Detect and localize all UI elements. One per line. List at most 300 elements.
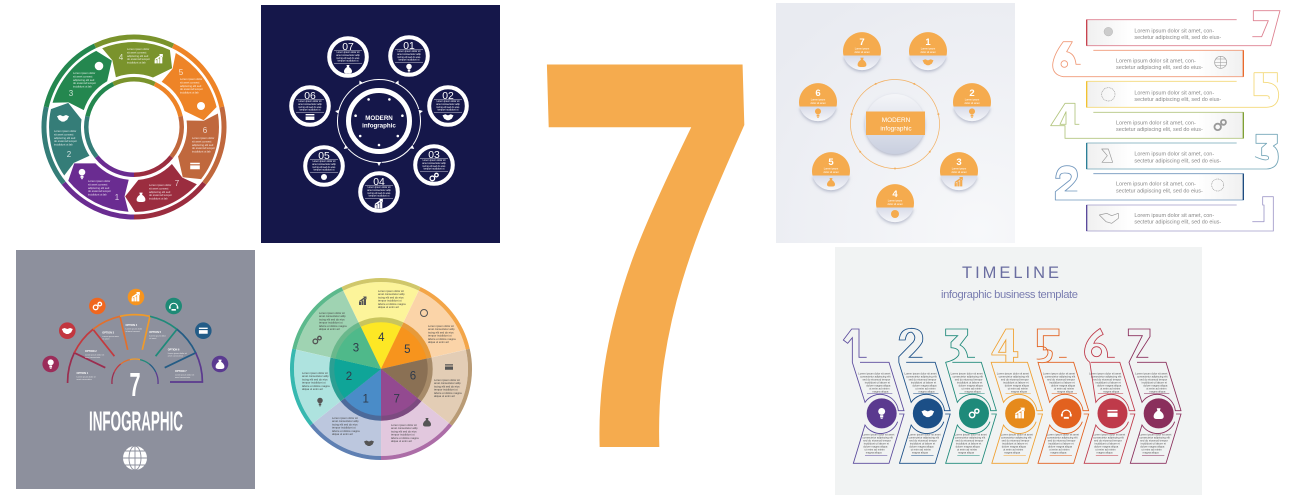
segment text: incididunt ut lab (149, 197, 168, 201)
column 3: consectetur adipiscing elit (952, 374, 983, 378)
segment text: incididunt ut lab (192, 150, 211, 154)
pie text: tempor incididunt ut (434, 388, 458, 392)
column 2: dolore magna aliqua (912, 383, 937, 387)
satellite text: Lorem ipsum dolor sit (437, 100, 459, 103)
column 4: Lorem ipsum dolor sit amet (997, 371, 1029, 375)
arch option labels: OPTION 3 (102, 332, 115, 334)
column 6: magna aliqua (1103, 389, 1120, 393)
row 3: sectetur adipiscing elit, sed do eius- (1134, 158, 1221, 164)
pie wedges (286, 280, 476, 466)
satellite text: tempor incididunt ut (314, 169, 335, 172)
pie icons (313, 296, 453, 446)
column 5: ut enim ad minim (1049, 448, 1070, 452)
arch option labels: amet consectetur (175, 376, 191, 379)
panel: navy circular infographic (261, 5, 500, 243)
centre title: MODERN (365, 115, 393, 122)
panel: segmented ring infographic (38, 37, 230, 225)
column 3: Lorem ipsum dolor sit amet (955, 433, 987, 437)
segment text: Lorem ipsum dolor (180, 78, 202, 81)
column 1: magna aliqua (866, 451, 882, 455)
column 3: Lorem ipsum dolor sit amet (951, 371, 983, 375)
satellite circles (291, 37, 467, 211)
segment text: do eiusmod tempor (73, 81, 96, 85)
column 6: incididunt ut labore et (1095, 442, 1120, 446)
segment numbers: 2 (67, 150, 72, 159)
column 5: incididunt ut labore et (1049, 380, 1075, 384)
row 4 (1051, 103, 1243, 138)
row 2: sectetur adipiscing elit, sed do eius- (1116, 188, 1203, 194)
central ring (348, 90, 410, 152)
segment text: do eiusmod tempor (88, 189, 111, 193)
step circle 5: 5 (828, 157, 834, 168)
row 1: sectetur adipiscing elit, sed do eius- (1134, 220, 1221, 226)
pie numbers: 7 (393, 393, 400, 405)
segment text: sit amet consect (127, 50, 147, 54)
satellite numbers: 03 (428, 150, 440, 161)
pie text: amet consectetur adip (332, 419, 359, 423)
satellite numbers (304, 41, 454, 188)
column 5: ut enim ad minim (1054, 386, 1075, 390)
step circle 4: Lorem ipsum (888, 200, 902, 202)
column 1: incididunt ut labore et (865, 380, 890, 384)
column 7: magna aliqua (1143, 451, 1159, 455)
satellite text: amet consectetur adip (436, 103, 460, 106)
step circle 4: 4 (892, 189, 898, 200)
column 3: ut enim ad minim (957, 448, 978, 452)
segment text: incididunt ut lab (88, 193, 107, 197)
segment text: adipiscing elit sed (54, 136, 76, 140)
step circle 7 (843, 32, 881, 70)
arch option labels: OPTION 2 (85, 350, 97, 353)
icon circles (42, 289, 228, 372)
arch option labels: sit amet (149, 337, 157, 340)
step circle 6: 6 (815, 88, 821, 99)
column 4: sed do eiusmod tempor (1001, 377, 1029, 381)
timeline subtitle: infographic business template (941, 289, 1078, 301)
arch option labels: OPTION 1 (76, 372, 89, 375)
pie text: aliqua ut enim ad (302, 387, 323, 391)
step circle 6: Lorem ipsum (811, 98, 825, 102)
row 7: sectetur adipiscing elit, sed do eius- (1134, 35, 1221, 41)
row 3: Lorem ipsum dolor sit amet, con- (1134, 152, 1214, 158)
satellite text: Lorem ipsum dolor sit (423, 159, 445, 162)
timeline title: TIMELINE (962, 264, 1059, 282)
column 6: Lorem ipsum dolor sit amet (1093, 433, 1125, 437)
step circle 5: dolor sit amet (823, 171, 839, 174)
column 2: magna aliqua (919, 389, 935, 393)
column 1: sed do eiusmod tempor (863, 439, 891, 443)
row 4: sectetur adipiscing elit, sed do eius- (1116, 127, 1203, 133)
segment text: sit amet consect (54, 132, 74, 136)
pie numbers: 4 (378, 332, 385, 344)
row 7 (1087, 11, 1280, 46)
pie text: aliqua ut enim ad (434, 394, 455, 398)
panel: orange circular infographic (776, 3, 1015, 243)
segment text: do eiusmod tempor (149, 193, 172, 197)
column 1 (843, 329, 904, 463)
column 3: dolore magna aliqua (956, 445, 980, 449)
step circle 3: dolor sit amet (951, 171, 967, 174)
outer arch arcs and spokes (68, 315, 202, 383)
column 2: Lorem ipsum dolor sit amet (904, 371, 937, 375)
pie text: Lorem ipsum dolor sit (391, 424, 417, 427)
centre title: infographic (362, 122, 396, 130)
step circle 7: Lorem ipsum (855, 48, 869, 50)
column 4: consectetur adipiscing elit (1001, 436, 1032, 440)
column 5: incididunt ut labore et (1048, 442, 1074, 446)
row 5: sectetur adipiscing elit, sed do eius- (1134, 97, 1221, 103)
satellite text: Lorem ipsum dolor sit (398, 50, 420, 53)
segment numbers: 1 (115, 193, 120, 202)
column 3: magna aliqua (958, 451, 974, 455)
column 2: Lorem ipsum dolor sit amet (908, 433, 941, 437)
row 6 (1053, 42, 1243, 77)
segment text: adipiscing elit sed (192, 143, 214, 147)
satellite text: Lorem ipsum dolor sit (337, 51, 359, 54)
pie text: Lorem ipsum dolor sit (428, 325, 454, 328)
column 7: incididunt ut labore et (1141, 442, 1166, 446)
column 7: dolore magna aliqua (1143, 383, 1168, 387)
satellite numbers: 05 (318, 151, 330, 162)
segment text: Lorem ipsum dolor (88, 180, 110, 183)
segment numbers: 4 (119, 53, 124, 62)
centre circle with title band (865, 94, 925, 154)
segment numbers: 7 (175, 179, 180, 188)
column 3: incididunt ut labore et (957, 380, 983, 384)
segment text: do eiusmod tempor (192, 146, 215, 150)
pie text: labore et dolore magna (319, 324, 347, 328)
column 4: consectetur adipiscing elit (999, 374, 1029, 378)
column 2 (899, 328, 950, 463)
satellite text: tempor incididunt ut (399, 59, 420, 62)
segment numbers: 5 (179, 68, 184, 77)
satellite text: amet consectetur adip (367, 189, 391, 192)
pie text: aliqua ut enim ad (391, 439, 412, 443)
column 4: incididunt ut labore et (1003, 380, 1029, 384)
column 2: consectetur adipiscing elit (909, 436, 939, 440)
column 7: ut enim ad minim (1142, 448, 1163, 452)
pie text: amet consectetur adip (434, 381, 461, 385)
pie text: iscing elit sed do eius (378, 295, 404, 299)
step circle 5: Lorem ipsum (824, 168, 838, 170)
step circle 2: dolor sit amet (964, 102, 980, 105)
pie text: amet consectetur adip (302, 374, 329, 378)
row 1: Lorem ipsum dolor sit amet, con- (1134, 213, 1214, 219)
column 7: consectetur adipiscing elit (1139, 436, 1170, 440)
column 5 (1037, 329, 1089, 463)
step circle 6 (799, 83, 837, 121)
column 1: incididunt ut labore et (864, 442, 889, 446)
segment text: adipiscing elit sed (127, 54, 149, 58)
satellite text: iscing elit sed do eius (313, 166, 336, 169)
column 4: Lorem ipsum dolor sit amet (1001, 433, 1033, 437)
step circle 2: 2 (969, 88, 975, 99)
ring of seven segments (38, 37, 230, 225)
timeline columns (843, 328, 1181, 463)
step circle 7: 7 (859, 37, 865, 48)
pie text: aliqua ut enim ad (428, 340, 449, 344)
step circle 1 (909, 32, 947, 70)
column 4: dolore magna aliqua (1002, 445, 1026, 449)
column 1: ut enim ad minim (869, 386, 890, 390)
column 5: dolore magna aliqua (1048, 445, 1073, 449)
satellite text: amet consectetur adip (298, 103, 322, 106)
pie text: tempor incididunt ut (332, 426, 356, 430)
segment text: sit amet consect (88, 182, 108, 186)
pie text (302, 289, 462, 443)
satellite numbers: 06 (304, 91, 316, 102)
column 4: dolore magna aliqua (1005, 383, 1029, 387)
pie text: iscing elit sed do eius (332, 422, 358, 426)
pie text: aliqua ut enim ad (378, 305, 399, 309)
column 7: sed do eiusmod tempor (1139, 377, 1167, 381)
icon: globe (123, 446, 147, 470)
pie text: aliqua ut enim ad (332, 432, 353, 436)
row 4: Lorem ipsum dolor sit amet, con- (1116, 120, 1196, 126)
column 6: sed do eiusmod tempor (1093, 377, 1121, 381)
segment text: adipiscing elit sed (73, 78, 95, 82)
centre title (362, 115, 396, 130)
column 7: dolore magna aliqua (1140, 445, 1165, 449)
column 3: consectetur adipiscing elit (955, 436, 985, 440)
column 2: ut enim ad minim (911, 448, 932, 452)
step circle 7: dolor sit amet (854, 51, 870, 54)
column 6: consectetur adipiscing elit (1091, 374, 1122, 378)
column 5: magna aliqua (1057, 389, 1073, 393)
arch option labels: amet consectetur (76, 378, 92, 381)
arch option labels: Lorem ipsum dolor sit (168, 352, 187, 355)
satellite text: amet consectetur adip (312, 163, 336, 166)
segment text: do eiusmod tempor (54, 139, 77, 143)
pie text: amet consectetur adip (378, 292, 405, 296)
light background (776, 3, 1015, 243)
column 4 (991, 329, 1042, 463)
column 7: magna aliqua (1149, 389, 1166, 393)
column 5: consectetur adipiscing elit (1047, 436, 1078, 440)
column 4: magna aliqua (1011, 389, 1027, 393)
segment text: adipiscing elit sed (149, 190, 171, 194)
column 7: ut enim ad minim (1146, 386, 1167, 390)
segment text: sit amet consect (73, 74, 93, 78)
column 2: ut enim ad minim (915, 386, 936, 390)
column 6 (1084, 328, 1135, 463)
satellite text: tempor incididunt ut (300, 109, 321, 112)
column 4: magna aliqua (1004, 451, 1021, 455)
pie text: iscing elit sed do eius (428, 330, 454, 334)
column 5: sed do eiusmod tempor (1048, 439, 1076, 443)
satellite text: iscing elit sed do eius (437, 106, 460, 109)
pie text: labore et dolore magna (378, 302, 406, 306)
column 6: magna aliqua (1097, 451, 1113, 455)
arch option labels: Lorem ipsum dolor (102, 336, 119, 338)
column 4: ut enim ad minim (1008, 386, 1029, 390)
timeline background (835, 247, 1202, 495)
pie text: iscing elit sed do eius (434, 384, 460, 388)
segment numbers: 3 (69, 89, 74, 98)
satellite numbers: 02 (442, 91, 454, 102)
arch option labels: Lorem ipsum dolor sit (85, 354, 105, 356)
segment text: incididunt ut lab (73, 85, 92, 89)
panel: grey semicircle infographic: INFOGRAPHIC (89, 406, 183, 437)
arch option labels: Lorem ipsum dolor (126, 328, 142, 330)
orbit line with arrows (850, 80, 940, 170)
step circle 3 (940, 152, 978, 190)
step circle 4: dolor sit amet (887, 203, 903, 206)
column 7: incididunt ut labore et (1142, 380, 1167, 384)
arch option labels: Lorem ipsum dolor sit (175, 374, 195, 376)
segment text: sit amet consect (149, 186, 169, 190)
column 2: consectetur adipiscing elit (906, 374, 937, 378)
satellite text: tempor incididunt ut (424, 168, 445, 171)
pie text: labore et dolore magna (428, 337, 456, 341)
column 6: sed do eiusmod tempor (1094, 439, 1122, 443)
arch option labels (76, 324, 195, 381)
column 1: consectetur adipiscing elit (862, 436, 893, 440)
column 1: magna aliqua (872, 389, 889, 393)
row 2: Lorem ipsum dolor sit amet, con- (1116, 182, 1196, 188)
satellite text: tempor incididunt ut (438, 109, 459, 112)
pie numbers (346, 332, 416, 405)
step circle 1: Lorem ipsum (921, 48, 935, 50)
column 1: Lorem ipsum dolor sit amet (858, 371, 891, 375)
inner arch arc (112, 359, 158, 384)
pie text: labore et dolore magna (302, 384, 330, 388)
column 2: sed do eiusmod tempor (909, 377, 936, 381)
satellite icons (306, 64, 454, 208)
row 6: sectetur adipiscing elit, sed do eius- (1116, 65, 1203, 71)
panel: seven slice pie (286, 280, 476, 466)
column 5: magna aliqua (1050, 451, 1067, 455)
satellite text: Lorem ipsum dolor sit (313, 160, 335, 163)
panel: grey semicircle infographic (16, 250, 255, 489)
satellite numbers: 04 (373, 177, 385, 188)
column 1: dolore magna aliqua (866, 383, 891, 387)
arch option labels: OPTION 4 (126, 324, 138, 327)
column 3: ut enim ad minim (962, 386, 983, 390)
segment icons (57, 54, 205, 202)
arch option labels: Lorem ipsum dolor (149, 336, 166, 338)
column 3: incididunt ut labore et (956, 442, 982, 446)
big seven in arch: 7 (129, 366, 141, 403)
column 6: dolore magna aliqua (1094, 445, 1119, 449)
column 6: ut enim ad minim (1100, 386, 1121, 390)
column 1: consectetur adipiscing elit (860, 374, 891, 378)
column 7: Lorem ipsum dolor sit amet (1139, 433, 1172, 437)
satellite text: iscing elit sed do eius (368, 192, 391, 195)
satellite text: iscing elit sed do eius (299, 106, 322, 109)
step circle 3: Lorem ipsum (952, 168, 966, 170)
pie numbers: 5 (404, 344, 411, 356)
column 3: dolore magna aliqua (959, 383, 983, 387)
satellite text: Lorem ipsum dolor sit (368, 186, 390, 189)
row 2 (1055, 166, 1243, 200)
column 7: consectetur adipiscing elit (1137, 374, 1168, 378)
pie text: Lorem ipsum dolor sit (378, 290, 404, 293)
pie text: Lorem ipsum dolor sit (434, 379, 460, 382)
arch option labels: amet consectetur (168, 354, 183, 358)
step circle 1: 1 (925, 37, 931, 48)
column 5: dolore magna aliqua (1051, 383, 1076, 387)
satellite text: iscing elit sed do eius (423, 165, 446, 168)
arch option labels: OPTION 7 (175, 370, 187, 373)
row 5 (1087, 73, 1279, 107)
step circle 5 (812, 152, 850, 190)
grey background (16, 250, 255, 489)
column 6: Lorem ipsum dolor sit amet (1089, 371, 1121, 375)
satellite text (298, 50, 460, 198)
step circle 4 (876, 184, 914, 222)
pie text: tempor incididunt ut (302, 381, 326, 385)
row 6: Lorem ipsum dolor sit amet, con- (1116, 58, 1196, 64)
satellite text: iscing elit sed do eius (337, 57, 360, 60)
satellite text: tempor incididunt ut (338, 60, 359, 63)
column 6: dolore magna aliqua (1097, 383, 1122, 387)
step circle 6: dolor sit amet (810, 102, 826, 105)
satellite text: iscing elit sed do eius (398, 56, 421, 59)
pie text: tempor incididunt ut (391, 433, 415, 437)
step circle 3: 3 (956, 157, 962, 168)
pie text: labore et dolore magna (332, 429, 360, 433)
segment text: Lorem ipsum dolor (149, 184, 171, 187)
panel: outlined stacked number rows (1051, 11, 1280, 231)
column 2: sed do eiusmod tempor (909, 439, 937, 443)
column 4: sed do eiusmod tempor (1002, 439, 1029, 443)
column 3: sed do eiusmod tempor (955, 377, 983, 381)
pie text: amet consectetur adip (428, 327, 455, 331)
satellite text: tempor incididunt ut (369, 195, 390, 198)
satellite numbers: 01 (403, 41, 415, 52)
segment text: sit amet consect (180, 80, 200, 84)
column 6: incididunt ut labore et (1096, 380, 1121, 384)
arch option labels: amet consectetur (85, 356, 101, 359)
pie text: iscing elit sed do eius (391, 429, 417, 433)
column 5: Lorem ipsum dolor sit amet (1047, 433, 1079, 437)
column 4: ut enim ad minim (1003, 448, 1024, 452)
pie text: amet consectetur adip (391, 426, 418, 430)
pie text: tempor incididunt ut (319, 321, 343, 325)
column 2: magna aliqua (912, 451, 928, 455)
orbit arrows (324, 66, 434, 176)
segment text: Lorem ipsum dolor (54, 130, 76, 133)
column 4: incididunt ut labore et (1002, 442, 1028, 446)
arch option labels: sit amet (102, 338, 110, 340)
column 7: sed do eiusmod tempor (1140, 439, 1168, 443)
panel: timeline (835, 247, 1202, 495)
centre circle with title band: infographic (880, 126, 912, 132)
column 2: dolore magna aliqua (909, 445, 934, 449)
segment text: sit amet consect (192, 139, 212, 143)
segment text: do eiusmod tempor (127, 57, 150, 61)
segment text: adipiscing elit sed (88, 186, 110, 190)
segment text: Lorem ipsum dolor (192, 137, 214, 140)
row 3 (1087, 134, 1278, 169)
column 3 (946, 329, 996, 463)
segment text: Lorem ipsum dolor (127, 48, 149, 51)
satellite text: amet consectetur adip (397, 53, 421, 56)
segment text: incididunt ut lab (180, 91, 199, 95)
satellite text: amet consectetur adip (336, 54, 360, 57)
pie text: amet consectetur adip (319, 314, 346, 318)
row 5: Lorem ipsum dolor sit amet, con- (1134, 90, 1214, 96)
column 5: Lorem ipsum dolor sit amet (1043, 371, 1075, 375)
pie text: Lorem ipsum dolor sit (319, 312, 345, 315)
column 6: consectetur adipiscing elit (1093, 436, 1124, 440)
column 3: magna aliqua (965, 389, 981, 393)
column 2: incididunt ut labore et (910, 442, 935, 446)
segment text: do eiusmod tempor (180, 87, 203, 91)
pie text: Lorem ipsum dolor sit (302, 372, 328, 375)
arch option labels: Lorem ipsum dolor sit (76, 376, 96, 378)
